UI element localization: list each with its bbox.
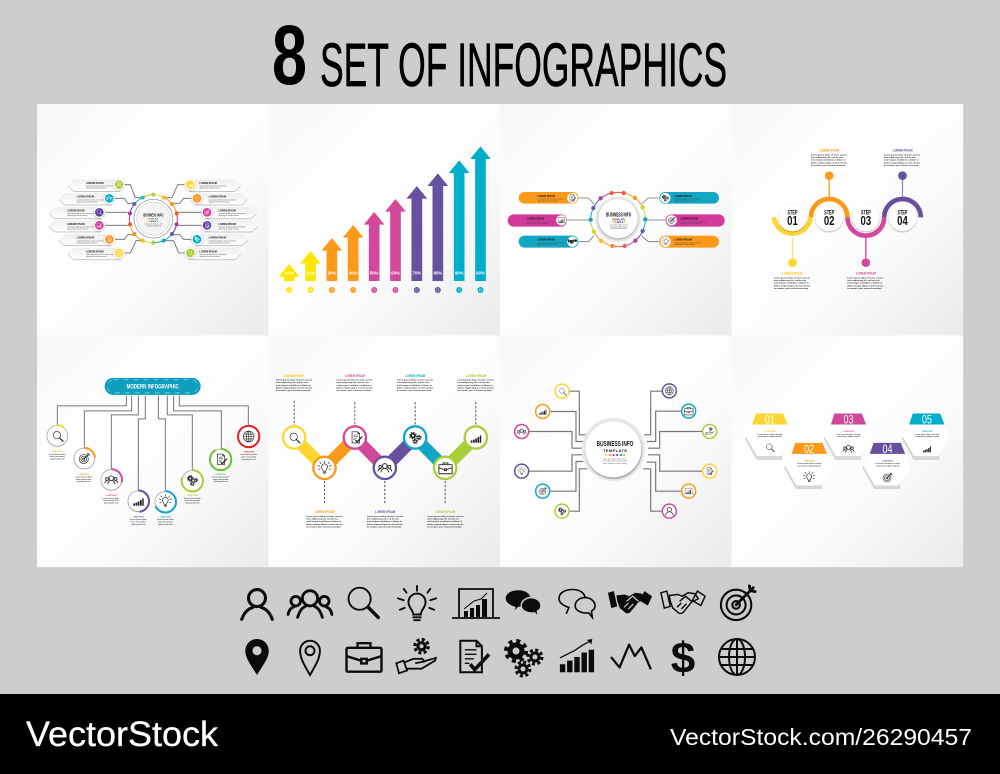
chain text top: mod tempor incididunt ut labore et	[336, 384, 372, 387]
node captions: LOREM IPSUM	[133, 516, 144, 518]
node captions: LOREM IPSUM	[243, 451, 255, 453]
tag text: LOREM IPSUM	[199, 182, 217, 185]
tag text: adipiscing elit sed do eiusmod	[218, 214, 239, 217]
step labels: STEP	[897, 209, 908, 216]
node captions: Lorem ipsum dolor	[49, 454, 66, 456]
step labels: STEP	[861, 209, 871, 216]
node captions: amet consectetur	[50, 455, 65, 458]
icon: user	[242, 590, 272, 619]
percentage labels: 30%	[327, 270, 337, 276]
tree connectors	[57, 395, 248, 490]
step 2 text: Lorem ipsum dolor sit amet, consec	[811, 153, 848, 156]
tag text	[67, 182, 246, 258]
tag text: LOREM IPSUM	[218, 209, 236, 212]
tag text: LOREM IPSUM	[209, 196, 226, 199]
icon: zigzag line	[611, 645, 651, 669]
tag labels	[49, 180, 258, 259]
step 4 text: mod tempor incididunt ut labore et	[884, 159, 919, 162]
hexagon 04: Lorem ipsum dolor sit amet	[875, 462, 900, 465]
step 1 text	[774, 271, 811, 290]
icon: chat outline	[559, 590, 595, 617]
pill text: Lorem ipsum dolor sit amet, consectetur	[537, 198, 565, 201]
node circles	[47, 425, 259, 512]
hub circle: Lorem ipsum dolor sit amet	[144, 223, 163, 226]
percentage labels: 80%	[433, 270, 443, 276]
tag text: LOREM IPSUM	[77, 237, 94, 240]
icon: hand with gear	[396, 639, 436, 673]
pill text: adipiscing elit sed do eiusmod	[537, 243, 558, 246]
step labels: 02	[824, 213, 834, 228]
hexagon 02: LOREM IPSUM	[804, 460, 815, 462]
pill text: adipiscing elit sed do eiusmod	[674, 199, 695, 202]
node captions: Lorem ipsum dolor	[157, 519, 174, 521]
hexagon 03	[823, 412, 871, 460]
step labels	[787, 209, 908, 228]
hexagon 01: consectetur adipiscing elit	[758, 435, 782, 438]
tag text: LOREM IPSUM	[86, 250, 104, 253]
outer node circles	[515, 384, 717, 518]
chain text top: im veniam, quis nostrud exercitati	[336, 389, 371, 392]
centre circle: tempor incididunt ut labore et dolore	[603, 462, 627, 465]
step 1 text: mod tempor incididunt ut labore et	[774, 282, 809, 285]
chain text top	[276, 373, 495, 392]
node captions: ipiscing elit sed	[104, 501, 119, 504]
step circles	[778, 203, 916, 231]
chain text top: im veniam, quis nostrud exercitati	[276, 389, 311, 392]
node captions: Lorem ipsum dolor	[103, 498, 120, 500]
hexagon 05	[901, 412, 949, 460]
tag text: Lorem ipsum dolor sit amet, consectetur	[218, 212, 246, 215]
chain text top: LOREM IPSUM	[466, 373, 486, 378]
tag text: adipiscing elit sed do eiusmod	[86, 187, 106, 190]
chain text top: tetur adipiscing elit, sed do eius	[276, 381, 309, 384]
step labels: STEP	[787, 209, 798, 216]
chain text bottom: Lorem ipsum dolor sit amet, consec	[367, 515, 404, 518]
panel: hexagon steps	[732, 336, 963, 567]
ring and centre circle: consectetur adipiscing elit	[610, 225, 628, 228]
tag circles	[94, 180, 212, 258]
chain text top: Lorem ipsum dolor sit amet, consec	[336, 378, 374, 381]
step 1 text: im veniam, quis nostrud exercitati	[774, 287, 809, 290]
arrows	[279, 146, 491, 281]
tag text: adipiscing elit sed do eiusmod	[77, 241, 97, 244]
node captions: amet consectetur	[185, 499, 200, 502]
icon set row 2	[245, 634, 755, 683]
step 4 text	[884, 147, 921, 167]
node captions: amet consectetur	[131, 520, 146, 523]
step 3 text: dolore magna aliqua ut enim ad min	[847, 284, 884, 287]
hexagon 01: Lorem ipsum dolor sit amet	[758, 433, 782, 436]
stems and dots	[788, 171, 907, 267]
chain text bottom: im veniam, quis nostrud exercitati	[427, 525, 462, 528]
chain text bottom: LOREM IPSUM	[435, 509, 456, 514]
node captions: ipiscing elit sed	[50, 457, 65, 460]
tag text: Lorem ipsum dolor sit amet, consectetur	[209, 198, 236, 201]
node icons	[517, 387, 714, 515]
chain text bottom: tetur adipiscing elit, sed do eius	[367, 517, 400, 520]
step 2 text: mod tempor incididunt ut labore et	[811, 159, 846, 162]
panel: four step timeline	[732, 104, 963, 336]
percentage labels	[285, 270, 485, 276]
tag text: LOREM IPSUM	[67, 209, 85, 212]
panel: business info radial tree	[500, 336, 732, 567]
chain text bottom: mod tempor incididunt ut labore et	[367, 520, 402, 523]
node captions: ipiscing elit sed	[77, 480, 92, 483]
icon: growth chart	[560, 639, 594, 672]
pill text: LOREM IPSUM	[527, 218, 544, 221]
centre circle: TEMPLATE	[603, 448, 627, 453]
chain text top: LOREM IPSUM	[405, 373, 426, 378]
chain text bottom: dolore magna aliqua ut enim ad min	[306, 523, 343, 526]
percentage labels: 70%	[412, 270, 422, 276]
pill text: Lorem ipsum dolor sit amet, consectetur	[537, 241, 565, 244]
icon: chat solid	[505, 590, 541, 617]
tag text: LOREM IPSUM	[209, 237, 226, 240]
percentage labels: 40%	[349, 270, 358, 276]
tag text: adipiscing elit sed do eiusmod	[67, 214, 87, 217]
hexagon 01: LOREM IPSUM	[764, 431, 776, 433]
pill text: LOREM IPSUM	[537, 195, 555, 198]
hexagon 04: 04	[882, 442, 893, 456]
hub circle: consectetur adipiscing	[146, 225, 161, 228]
tag text: adipiscing elit sed do eiusmod	[218, 228, 239, 231]
icon set row 1	[242, 586, 755, 620]
step labels: 03	[860, 213, 871, 228]
footer logo: VectorStock	[26, 714, 218, 754]
panel: business info ring with pills	[500, 104, 732, 336]
node captions: amet consectetur	[158, 520, 173, 523]
branch lines	[529, 391, 702, 511]
icon: gears	[506, 641, 542, 676]
step 4 text: tetur adipiscing elit, sed do eius	[884, 156, 917, 159]
hub circle: TEMPLATE	[148, 217, 159, 220]
pill text	[527, 195, 708, 246]
pill text: LOREM IPSUM	[674, 239, 692, 242]
tag text: LOREM IPSUM	[218, 223, 236, 226]
chain icons	[290, 432, 481, 474]
chain text bottom: mod tempor incididunt ut labore et	[427, 520, 463, 523]
node captions: LOREM IPSUM	[78, 474, 90, 476]
tag text: LOREM IPSUM	[77, 196, 94, 199]
icon: people	[288, 591, 332, 617]
step 2 text: tetur adipiscing elit, sed do eius	[811, 156, 844, 159]
panel: rising arrows chart	[268, 104, 500, 336]
percentage labels: 60%	[391, 270, 400, 276]
step 3 text: Lorem ipsum dolor sit amet, consec	[847, 276, 884, 279]
chain text top: dolore magna aliqua ut enim ad min	[276, 386, 313, 389]
percentage labels: 90%	[476, 270, 485, 276]
tag text: Lorem ipsum dolor sit amet, consectetur	[209, 239, 236, 242]
hexagon 04: LOREM IPSUM	[882, 460, 894, 462]
node captions: LOREM IPSUM	[106, 495, 117, 497]
hexagon 03: LOREM IPSUM	[843, 431, 855, 433]
dashed stems	[294, 400, 476, 504]
percentage labels: 50%	[370, 270, 379, 276]
tag text: Lorem ipsum dolor sit amet, consectetur	[86, 253, 113, 256]
hexagon 02: consectetur adipiscing elit	[797, 464, 821, 467]
hexagon 05: 05	[922, 412, 932, 426]
tag text: Lorem ipsum dolor sit amet, consectetur	[86, 185, 113, 188]
step 3 text: im veniam, quis nostrud exercitati	[847, 287, 882, 290]
ring and centre circle: BUSINESS INFO	[606, 213, 632, 219]
progress arcs	[47, 425, 259, 512]
centre circle: Lorem ipsum dolor sit amet consec	[603, 457, 627, 460]
icon: pin solid	[245, 639, 269, 675]
icon: briefcase	[347, 643, 381, 672]
node captions: ipiscing elit sed	[158, 523, 173, 526]
hexagon 01	[744, 412, 792, 460]
node captions: LOREM IPSUM	[52, 451, 63, 453]
step 2 text: dolore magna aliqua ut enim ad min	[811, 161, 848, 164]
node captions	[49, 451, 257, 526]
tag text: Lorem ipsum dolor sit amet, consectetur	[199, 185, 227, 188]
pill text: Lorem ipsum dolor sit amet, consectetur	[527, 220, 554, 223]
node captions: ipiscing elit sed	[131, 523, 146, 526]
chain text top: tetur adipiscing elit, sed do eius	[336, 381, 370, 384]
chain text bottom: tetur adipiscing elit, sed do eius	[306, 517, 339, 520]
node captions: LOREM IPSUM	[160, 516, 171, 518]
tag text: LOREM IPSUM	[86, 182, 104, 185]
tag text: adipiscing elit sed do eiusmod	[209, 200, 229, 203]
icon: light bulb	[398, 586, 436, 620]
hexagon 01: 01	[765, 412, 775, 426]
footer url: VectorStock.com/26290457	[670, 724, 972, 750]
chain links	[294, 437, 476, 468]
hexagon 03: Lorem ipsum dolor sit amet	[836, 433, 861, 436]
step 4 text: dolore magna aliqua ut enim ad min	[884, 161, 921, 164]
tag text: adipiscing elit sed do eiusmod	[199, 187, 220, 190]
step 1 text: LOREM IPSUM	[782, 271, 803, 276]
chain text top: tetur adipiscing elit, sed do eius	[457, 381, 491, 384]
node captions: LOREM IPSUM	[215, 474, 227, 476]
chain text top: LOREM IPSUM	[345, 373, 365, 378]
hexagon 05: LOREM IPSUM	[921, 431, 933, 433]
header pill: MODERN INFOGRAPHIC	[127, 383, 179, 390]
chain text top: Lorem ipsum dolor sit amet, consec	[276, 378, 313, 381]
percentage labels: 10%	[285, 270, 294, 276]
chain text top: mod tempor incididunt ut labore et	[276, 384, 311, 387]
node captions: amet consectetur	[241, 455, 257, 458]
pills	[508, 192, 725, 248]
hexagon 03: 03	[843, 412, 854, 426]
connectors	[567, 198, 666, 242]
chain text top: im veniam, quis nostrud exercitati	[457, 389, 492, 392]
chain text bottom: LOREM IPSUM	[314, 509, 335, 514]
header pill	[105, 378, 201, 395]
tag text: adipiscing elit sed do eiusmod	[77, 200, 97, 203]
node captions: Lorem ipsum dolor	[240, 454, 257, 456]
tag text: Lorem ipsum dolor sit amet, consectetur	[77, 239, 104, 242]
title: SET OF INFOGRAPHICS	[320, 31, 727, 99]
hexagon 02	[784, 442, 832, 489]
tag text: adipiscing elit sed do eiusmod	[199, 255, 220, 258]
tag icons	[96, 182, 210, 255]
tag text: Lorem ipsum dolor sit amet, consectetur	[218, 226, 246, 229]
bottom markers	[286, 287, 483, 293]
ring and centre circle: Lorem ipsum dolor sit amet	[610, 223, 628, 226]
chain text bottom: Lorem ipsum dolor sit amet, consec	[427, 515, 464, 518]
percentage labels: 90%	[455, 270, 464, 276]
node captions: Lorem ipsum dolor	[184, 498, 201, 500]
step 1 text: dolore magna aliqua ut enim ad min	[774, 284, 811, 287]
step 2 text	[811, 147, 848, 167]
icon: dollar: $	[671, 634, 695, 683]
node captions: amet consectetur	[103, 499, 119, 502]
pill text: LOREM IPSUM	[674, 195, 692, 198]
chain text bottom: dolore magna aliqua ut enim ad min	[427, 523, 464, 526]
step 1 text: tetur adipiscing elit, sed do eius	[774, 279, 807, 282]
hexagon 04	[862, 442, 910, 489]
hexagon 02: Lorem ipsum dolor sit amet	[797, 462, 822, 465]
icon: laptop chart	[452, 589, 500, 618]
tag text: adipiscing elit sed do eiusmod	[86, 255, 106, 258]
pill text: Lorem ipsum dolor sit amet, consectetur	[674, 241, 702, 244]
pill text: adipiscing elit sed do eiusmod	[674, 243, 695, 246]
tag text: Lorem ipsum dolor sit amet, consectetur	[67, 226, 94, 229]
panel: modern infographic tree	[37, 336, 269, 567]
tag text: Lorem ipsum dolor sit amet, consectetur	[77, 198, 104, 201]
tag text: LOREM IPSUM	[199, 250, 217, 253]
title	[272, 8, 727, 102]
percentage labels: 20%	[306, 270, 315, 276]
node captions: ipiscing elit sed	[214, 480, 229, 483]
hexagon 05: Lorem ipsum dolor sit amet	[915, 433, 939, 436]
chain text top: dolore magna aliqua ut enim ad min	[457, 386, 494, 389]
pill icons	[557, 195, 675, 245]
step 4 text: LOREM IPSUM	[892, 147, 913, 152]
step 4 text: im veniam, quis nostrud exercitati	[884, 164, 919, 167]
chain text top: tetur adipiscing elit, sed do eius	[397, 381, 430, 384]
chain text bottom	[306, 509, 464, 528]
tag text: Lorem ipsum dolor sit amet, consectetur	[199, 253, 227, 256]
icon: handshake solid	[608, 591, 652, 613]
tag text: Lorem ipsum dolor sit amet, consectetur	[67, 212, 94, 215]
chain text top: LOREM IPSUM	[283, 373, 304, 378]
ring and centre circle: TEMPLATE	[612, 217, 625, 221]
hexagon 05: consectetur adipiscing elit	[915, 435, 939, 438]
chain nodes	[282, 425, 488, 480]
chain text bottom: Lorem ipsum dolor sit amet, consec	[306, 515, 343, 518]
tag text: adipiscing elit sed do eiusmod	[67, 228, 87, 231]
step 3 text: tetur adipiscing elit, sed do eius	[847, 279, 880, 282]
node captions: amet consectetur	[76, 478, 92, 481]
panel: hub with twelve tags	[37, 104, 269, 336]
step 2 text: LOREM IPSUM	[819, 147, 840, 152]
chain text top: Lorem ipsum dolor sit amet, consec	[397, 378, 434, 381]
panel: chain timeline	[268, 336, 500, 567]
chain text top: Lorem ipsum dolor sit amet, consec	[457, 378, 495, 381]
chain text bottom: LOREM IPSUM	[375, 509, 396, 514]
tag text: adipiscing elit sed do eiusmod	[209, 241, 229, 244]
title: 8	[272, 8, 307, 102]
chain text top: mod tempor incididunt ut labore et	[457, 384, 493, 387]
wave arcs	[774, 199, 921, 236]
node captions: ipiscing elit sed	[242, 458, 257, 461]
connector lines	[105, 185, 203, 253]
pill text: LOREM IPSUM	[537, 239, 555, 242]
step 2 text: im veniam, quis nostrud exercitati	[811, 164, 846, 167]
chain text top: dolore magna aliqua ut enim ad min	[397, 386, 434, 389]
icon: globe	[719, 639, 755, 675]
tag text: LOREM IPSUM	[67, 223, 85, 226]
step 1 text: Lorem ipsum dolor sit amet, consec	[774, 276, 811, 279]
chain text top: im veniam, quis nostrud exercitati	[397, 389, 432, 392]
node icons	[53, 431, 254, 506]
node captions: LOREM IPSUM	[187, 495, 198, 497]
node captions: ipiscing elit sed	[185, 501, 200, 504]
centre circle: tetur adipiscing elit sed do eiusmod	[603, 459, 627, 462]
footer bar	[0, 694, 1000, 774]
step 3 text: mod tempor incididunt ut labore et	[847, 282, 883, 285]
chain text bottom: im veniam, quis nostrud exercitati	[367, 525, 402, 528]
chain text bottom: mod tempor incididunt ut labore et	[306, 520, 342, 523]
chain text top: mod tempor incididunt ut labore et	[397, 384, 432, 387]
node captions: Lorem ipsum dolor	[75, 476, 92, 478]
pill text: adipiscing elit sed do eiusmod	[537, 199, 558, 202]
hub circle	[128, 193, 179, 245]
pill text: LOREM IPSUM	[680, 218, 698, 221]
ring and centre circle	[588, 191, 647, 248]
hexagon 04: consectetur adipiscing elit	[876, 464, 900, 467]
step 3 text	[847, 271, 884, 290]
icon: handshake outline	[661, 591, 705, 613]
centre circle: BUSINESS INFO	[597, 439, 634, 448]
step labels: 04	[897, 213, 908, 228]
step labels: STEP	[824, 209, 834, 216]
pill text: adipiscing elit sed do eiusmod	[527, 222, 547, 225]
icon: pin outline	[300, 641, 320, 675]
node captions: Lorem ipsum dolor	[212, 476, 229, 478]
chain text bottom: im veniam, quis nostrud exercitati	[306, 525, 341, 528]
hexagon 03: consectetur adipiscing elit	[837, 435, 861, 438]
icon: magnifier	[349, 588, 378, 617]
step 4 text: Lorem ipsum dolor sit amet, consec	[884, 153, 921, 156]
hub circle: BUSINESS INFO	[143, 213, 164, 218]
chain text bottom: dolore magna aliqua ut enim ad min	[367, 523, 404, 526]
centre circle	[582, 418, 645, 481]
hexagon 02: 02	[804, 442, 814, 456]
ring and centre circle: sed do eiusmod tempor	[611, 227, 627, 230]
step 3 text: LOREM IPSUM	[856, 271, 876, 276]
pill text: adipiscing elit sed do eiusmod	[680, 222, 701, 225]
chain text bottom: tetur adipiscing elit, sed do eius	[427, 517, 460, 520]
pill text: Lorem ipsum dolor sit amet, consectetur	[674, 198, 702, 201]
node captions: Lorem ipsum dolor	[130, 519, 147, 521]
step labels: 01	[787, 213, 798, 228]
chain text top: dolore magna aliqua ut enim ad min	[336, 386, 373, 389]
icon: document check	[460, 641, 489, 672]
node captions: amet consectetur	[213, 478, 229, 481]
icon: target	[721, 586, 755, 620]
pill text: Lorem ipsum dolor sit amet, consectetur	[680, 220, 708, 223]
